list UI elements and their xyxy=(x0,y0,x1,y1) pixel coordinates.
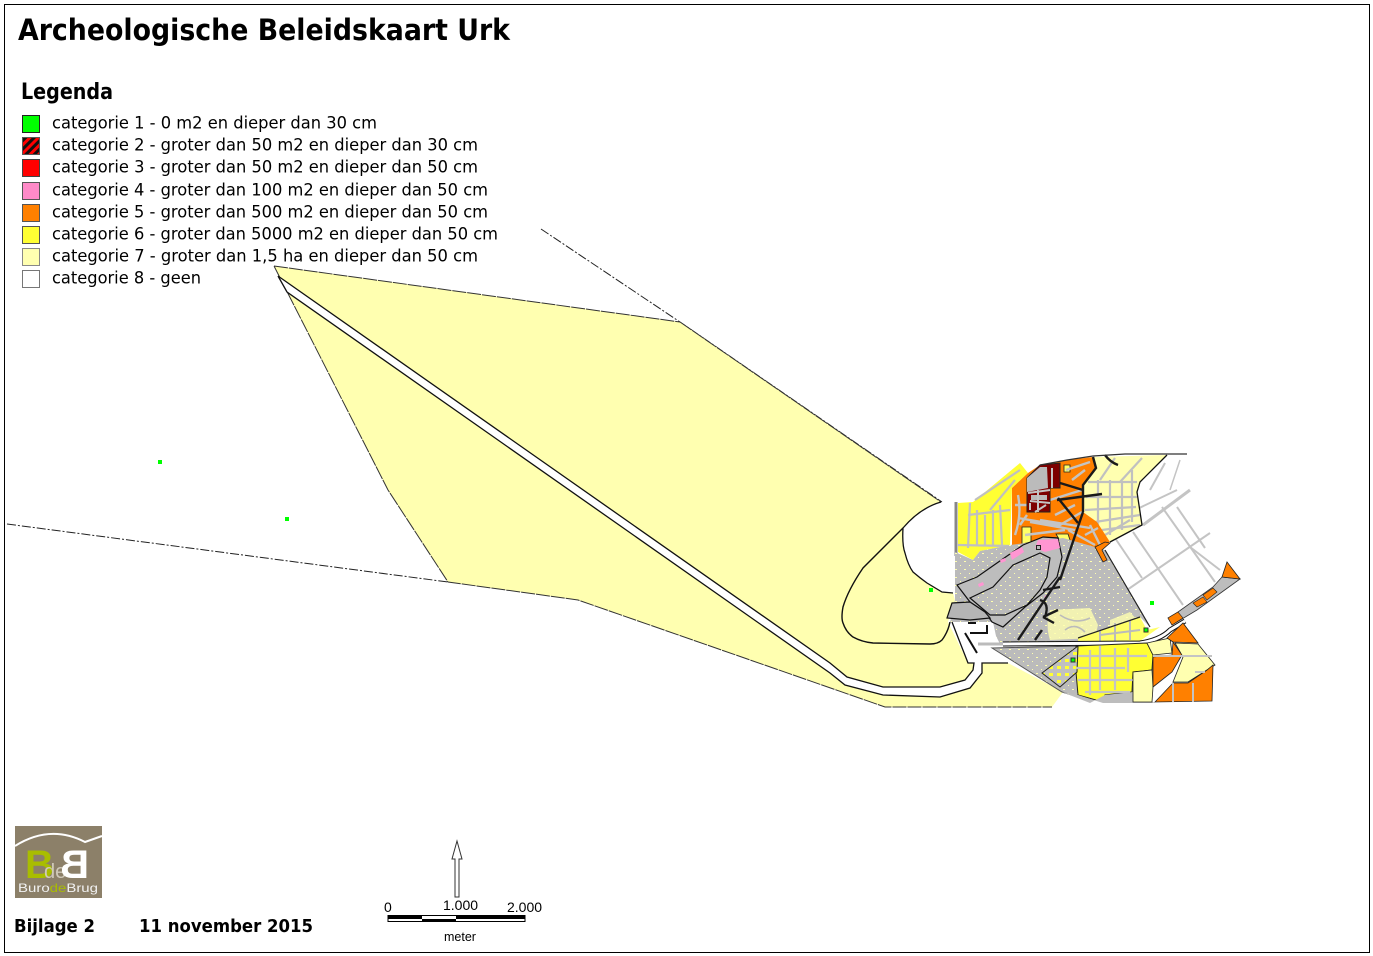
map: north-east pale neighbourhood xyxy=(1083,455,1167,542)
map: white eastern polder xyxy=(1105,454,1227,627)
map: inner white bay outline xyxy=(903,502,953,593)
date: 11 november 2015 xyxy=(139,916,313,937)
scale label 2.000: 2.000 xyxy=(507,899,542,915)
map: thick black roads xyxy=(1018,455,1118,640)
legend xyxy=(21,80,498,288)
logo: green B: B xyxy=(25,843,54,887)
map: north-west yellow neighbourhood (categorie 6) xyxy=(958,463,1028,560)
map: harbour grey road stub xyxy=(978,642,1004,646)
map: southern grey triangle xyxy=(992,646,1078,697)
map: south-east pale cell xyxy=(1133,638,1172,702)
map: pale zone outline xyxy=(274,266,1052,707)
map: historic core streets xyxy=(1028,468,1052,512)
scale label 1.000: 1.000 xyxy=(443,897,478,913)
map: grey ring inner area xyxy=(970,553,1050,615)
map: southern mixed yellow wedge xyxy=(1042,646,1078,687)
north arrow xyxy=(452,841,462,897)
map: southern road grid xyxy=(1076,646,1147,695)
legend item: categorie 6: categorie 6 - groter dan 5000 m2 en dieper dan 50 cm xyxy=(52,224,498,244)
map: coastal orange blocks xyxy=(1168,588,1217,625)
map: south-east orange area 1 xyxy=(1167,623,1198,643)
map: north-east edge xyxy=(1110,455,1167,542)
map: historic core grey blocks xyxy=(1027,467,1048,500)
legend item: categorie 1: categorie 1 - 0 m2 en dieper dan 30 cm xyxy=(52,114,377,134)
map: built-up east edge xyxy=(1078,550,1150,638)
map: eastern polder road grid xyxy=(1115,460,1220,605)
map: south road strip xyxy=(1003,621,1185,644)
map: large pale yellow zone (categorie 7) xyxy=(274,266,1063,707)
map: north-west road grid xyxy=(956,470,1020,556)
map xyxy=(7,229,1240,707)
map: south-east orange area 3 xyxy=(1155,665,1213,702)
map: east orange triangle xyxy=(1222,562,1240,579)
map: east coastal strip xyxy=(1168,577,1240,625)
map: pale strip under north-west block xyxy=(973,546,1010,562)
map: southern yellow neighbourhood (categorie 6) xyxy=(1076,643,1153,702)
map: pink zones (categorie 4) xyxy=(978,539,1060,598)
map: central orange neighbourhood (categorie 5) xyxy=(1012,457,1110,550)
map: orange road grid xyxy=(1015,462,1100,545)
legend item: categorie 4: categorie 4 - groter dan 100 m2 en dieper dan 50 cm xyxy=(52,180,488,200)
map: inner sand flat contour xyxy=(842,528,950,644)
map: pale cells in orange xyxy=(1022,465,1072,546)
scale bar xyxy=(384,897,542,944)
legend item: categorie 2: categorie 2 - groter dan 50 m2 en dieper dan 30 cm xyxy=(52,136,478,156)
map: east yellow strip (categorie 6) xyxy=(1078,617,1160,643)
map: southern grey edge xyxy=(1062,692,1155,703)
legend item: categorie 7: categorie 7 - groter dan 1,5 ha en dieper dan 50 cm xyxy=(52,246,478,266)
map: central pale patch xyxy=(1048,608,1137,640)
map: south-east grey lines xyxy=(1153,656,1212,702)
map: central pale patch squiggles xyxy=(1060,615,1090,632)
map: dike road edges xyxy=(278,276,1008,697)
map: orange jetty xyxy=(1095,542,1110,562)
scale unit: meter xyxy=(444,930,476,944)
scale label 0: 0 xyxy=(384,899,392,915)
map: grey ring outer blob xyxy=(957,537,1062,627)
legend item: categorie 8: categorie 8 - geen xyxy=(52,268,201,288)
map: east yellow strip streets xyxy=(1100,620,1140,642)
map: south road centre xyxy=(1003,621,1185,644)
map: harbour piers xyxy=(965,623,987,653)
map: green point markers (categorie 1) xyxy=(158,460,1154,662)
annex label: Bijlage 2 xyxy=(14,916,95,937)
logo: de: de xyxy=(44,861,66,883)
logo: white mirrored B: B xyxy=(60,843,89,887)
map: north-east road grid xyxy=(1085,458,1142,535)
map: pink zone small block xyxy=(1036,546,1040,550)
map: lower grey blob xyxy=(947,602,990,620)
map: dike road xyxy=(278,276,1030,697)
legend item: categorie 3: categorie 3 - groter dan 50 m2 en dieper dan 50 cm xyxy=(52,158,478,178)
map: dash-dot boundary lines xyxy=(7,229,942,582)
map: south-east pale area xyxy=(1173,643,1215,682)
logo: Buro de Brug xyxy=(15,826,102,898)
scale bar graphic xyxy=(388,916,525,922)
logo: bridge arc xyxy=(15,834,102,846)
map: north coast line xyxy=(1040,454,1187,465)
title: Archeologische Beleidskaart Urk xyxy=(18,13,511,47)
map: south-east orange area 2 xyxy=(1153,642,1182,687)
legend heading: Legenda xyxy=(21,80,113,105)
map: central grey built-up area xyxy=(950,538,1150,644)
logo: wordmark: Buro de Brug xyxy=(18,881,98,895)
map: historic core dark red (categorie 2) xyxy=(1027,463,1060,512)
legend item: categorie 5: categorie 5 - groter dan 500 m2 en dieper dan 50 cm xyxy=(52,202,488,222)
